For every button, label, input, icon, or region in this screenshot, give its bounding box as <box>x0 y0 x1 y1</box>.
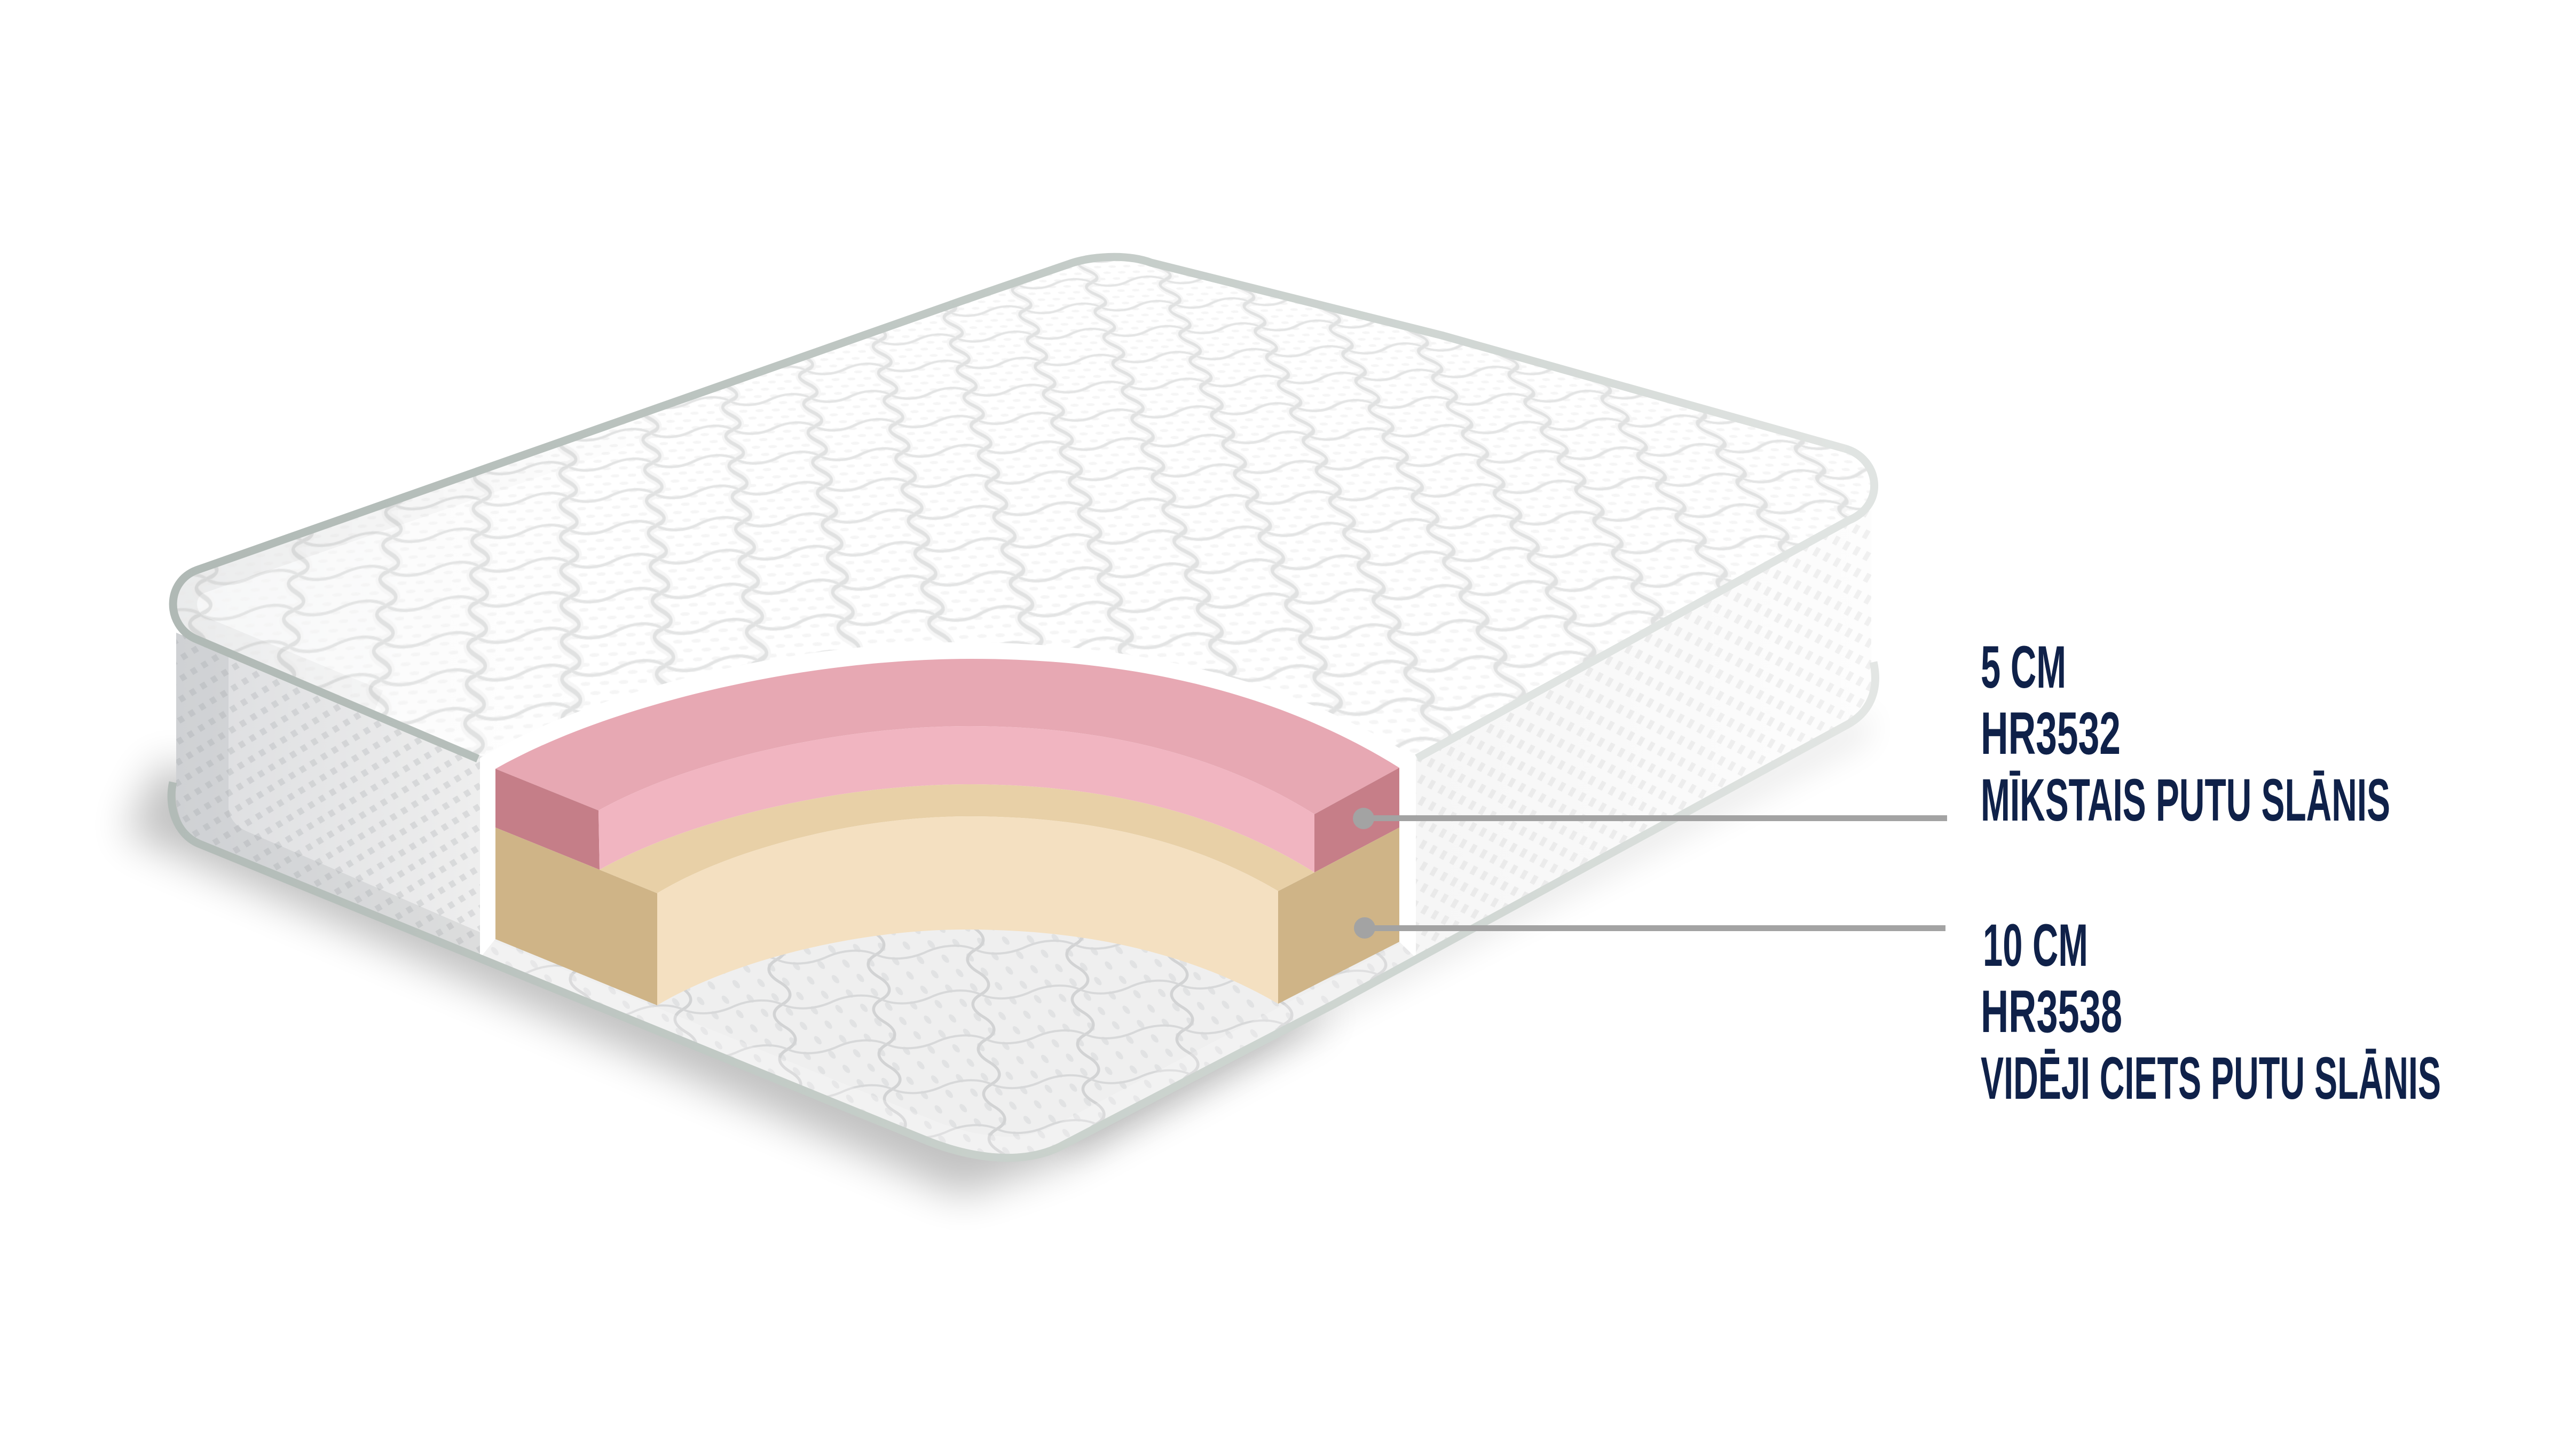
top surface rim tint <box>177 536 306 681</box>
label: firm foam layer <box>1981 912 2441 1112</box>
left side face <box>176 633 480 961</box>
firm foam layer: top face <box>600 784 1314 893</box>
top piping <box>173 257 1845 759</box>
label: soft foam layer <box>1981 634 2390 833</box>
label: soft foam layer: 5 CM <box>1981 634 2066 700</box>
bottom piping <box>171 662 1875 1158</box>
top surface fill <box>173 257 1874 908</box>
label: firm foam layer: 10 CM <box>1983 912 2088 979</box>
top piping: right front <box>1417 448 1874 758</box>
firm foam layer: left face <box>495 828 657 1005</box>
white cut-out border <box>480 642 1416 960</box>
soft foam layer: right face <box>1314 768 1399 872</box>
label: firm foam layer: HR3538 <box>1981 978 2122 1045</box>
drop shadow <box>125 710 1869 1196</box>
mattress edge bands <box>171 257 1875 1158</box>
leader: firm foam <box>1354 917 1945 939</box>
right side face <box>1416 510 1873 961</box>
soft foam layer: inner face <box>598 726 1314 872</box>
firm foam layer: inner face <box>657 816 1278 1005</box>
leader: soft foam <box>1353 808 1947 829</box>
mattress overlay: cut-out, foam layers, edge bands, labels <box>168 253 2440 1161</box>
soft foam layer: left face <box>495 769 600 870</box>
soft foam layer: top face <box>495 659 1399 814</box>
quilted pattern on top surface <box>177 261 1870 759</box>
firm foam layer: right face <box>1278 828 1399 1004</box>
foam cutaway <box>495 659 1399 1005</box>
lower quilted surface <box>483 930 1414 1154</box>
label: soft foam layer: HR3532 <box>1981 700 2121 767</box>
